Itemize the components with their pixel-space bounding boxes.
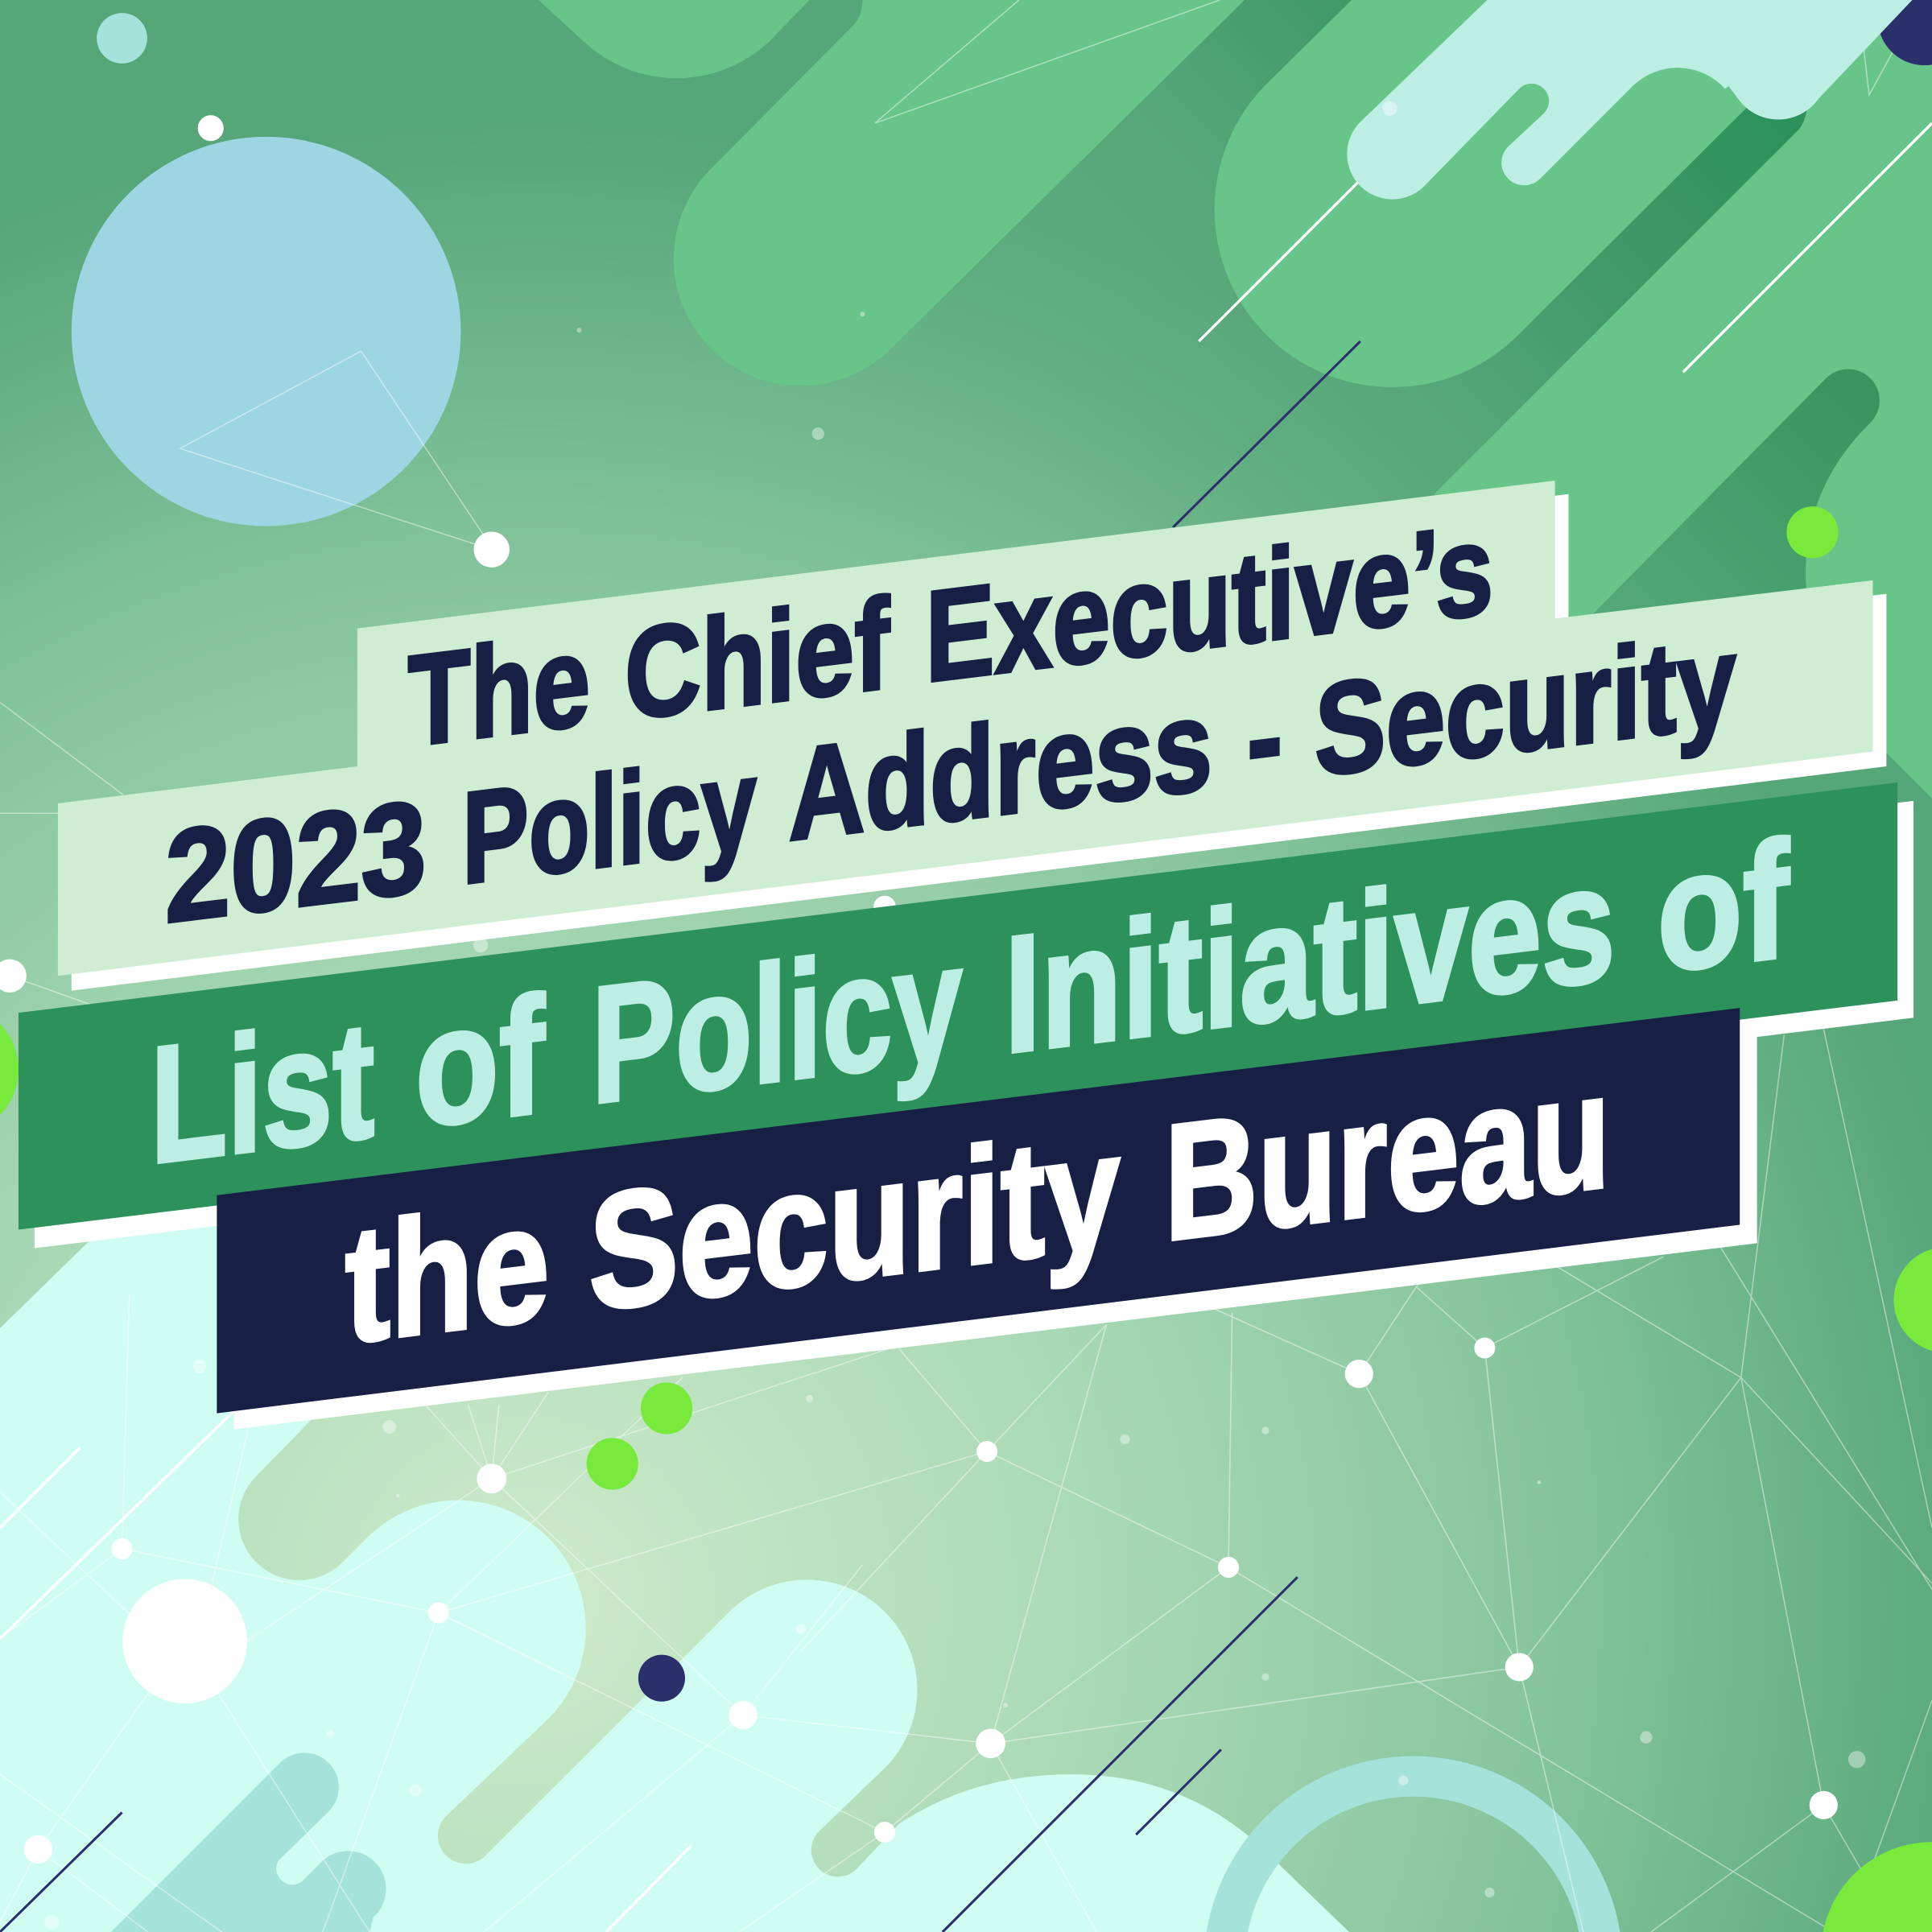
- title line 4: Bureau: [1164, 1037, 1611, 1276]
- darker aqua shape bottom left: [111, 1752, 386, 1932]
- title line 3: Policy: [592, 907, 962, 1138]
- banner: navy panel: [217, 1008, 1757, 1430]
- title line 2: Address: [789, 671, 1212, 869]
- mid-green shapes top: [539, 0, 1932, 799]
- navy dot: [638, 1655, 685, 1702]
- title line 3: Initiatives: [1004, 828, 1616, 1088]
- title line 3: List: [151, 985, 374, 1199]
- mint shape top right: [1347, 0, 1932, 200]
- bottom aqua shape: [0, 1220, 1349, 1932]
- title line 4: Security: [589, 1096, 1120, 1346]
- aqua ring: [1207, 1757, 1620, 1932]
- title line 1: Chief: [625, 571, 890, 748]
- title line 2: Policy: [462, 730, 757, 912]
- title line 2: -: [1247, 662, 1282, 812]
- teal dot top left: [97, 13, 147, 64]
- title line 3: of: [1657, 805, 1790, 1007]
- title line 4: the: [345, 1169, 550, 1378]
- banner: green panel: [19, 782, 1913, 1249]
- title line 1: [408, 496, 1493, 774]
- title line 2: 2023: [165, 773, 427, 951]
- title line 2: Security: [1315, 607, 1736, 804]
- banner: pale heading panel: [58, 481, 1886, 991]
- title line 1: The: [408, 608, 590, 774]
- lime dots: [0, 506, 1932, 1932]
- dark diagonal band: [890, 0, 1809, 616]
- title line 2: [165, 607, 1736, 951]
- title line 1: Executive’s: [925, 496, 1493, 710]
- title line 4: [345, 1037, 1611, 1378]
- navy diagonal lines: [0, 341, 1360, 1932]
- pale blue circle: [72, 137, 460, 526]
- dark rounded stripe right: [1479, 369, 1880, 739]
- title line 3: [151, 805, 1790, 1199]
- title line 3: of: [415, 960, 545, 1162]
